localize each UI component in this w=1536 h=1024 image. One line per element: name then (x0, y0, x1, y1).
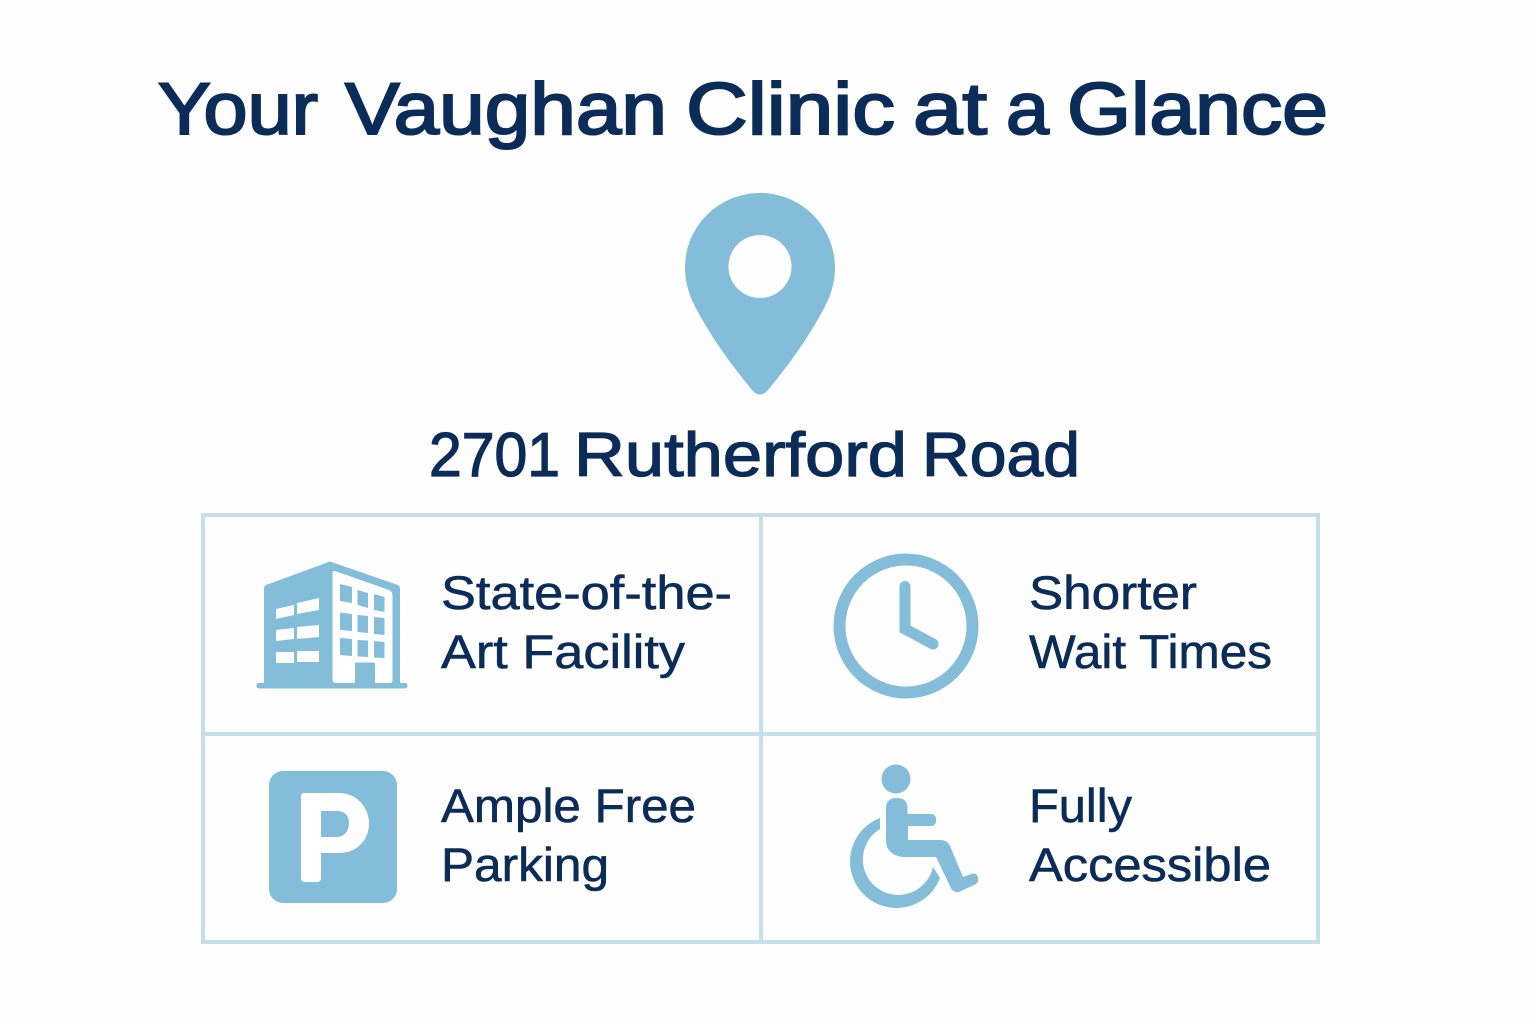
label: Parking (441, 838, 609, 891)
icon: clock (840, 560, 972, 692)
title (158, 67, 1328, 150)
address (429, 421, 1080, 490)
label (1029, 566, 1272, 678)
icon: parking sign (269, 771, 397, 903)
icon: building (256, 562, 408, 688)
feature: shorter wait times (840, 560, 1272, 692)
label: Shorter (1029, 566, 1197, 619)
label (441, 566, 732, 678)
feature: ample free parking (269, 771, 696, 903)
feature: fully accessible (850, 764, 1271, 908)
title: at (913, 67, 987, 150)
feature: state-of-the-art facility (256, 562, 732, 688)
label: Wait Times (1029, 625, 1272, 678)
address: Rutherford (574, 421, 907, 490)
title: Clinic (686, 67, 895, 150)
panel: features grid (203, 515, 1318, 942)
label: Ample Free (441, 779, 696, 832)
address: Road (922, 421, 1080, 490)
title: a (1006, 67, 1049, 150)
label: Art Facility (441, 625, 686, 678)
label: State-of-the- (441, 566, 732, 619)
title: Glance (1067, 67, 1328, 150)
label (1029, 779, 1271, 891)
icon: wheelchair (850, 764, 978, 908)
title: Vaughan (345, 67, 667, 150)
label (441, 779, 696, 891)
title: Your (158, 67, 318, 150)
address: 2701 (429, 421, 560, 490)
label: Fully (1029, 779, 1133, 832)
icon: location pin (685, 193, 835, 394)
label: Accessible (1029, 838, 1271, 891)
